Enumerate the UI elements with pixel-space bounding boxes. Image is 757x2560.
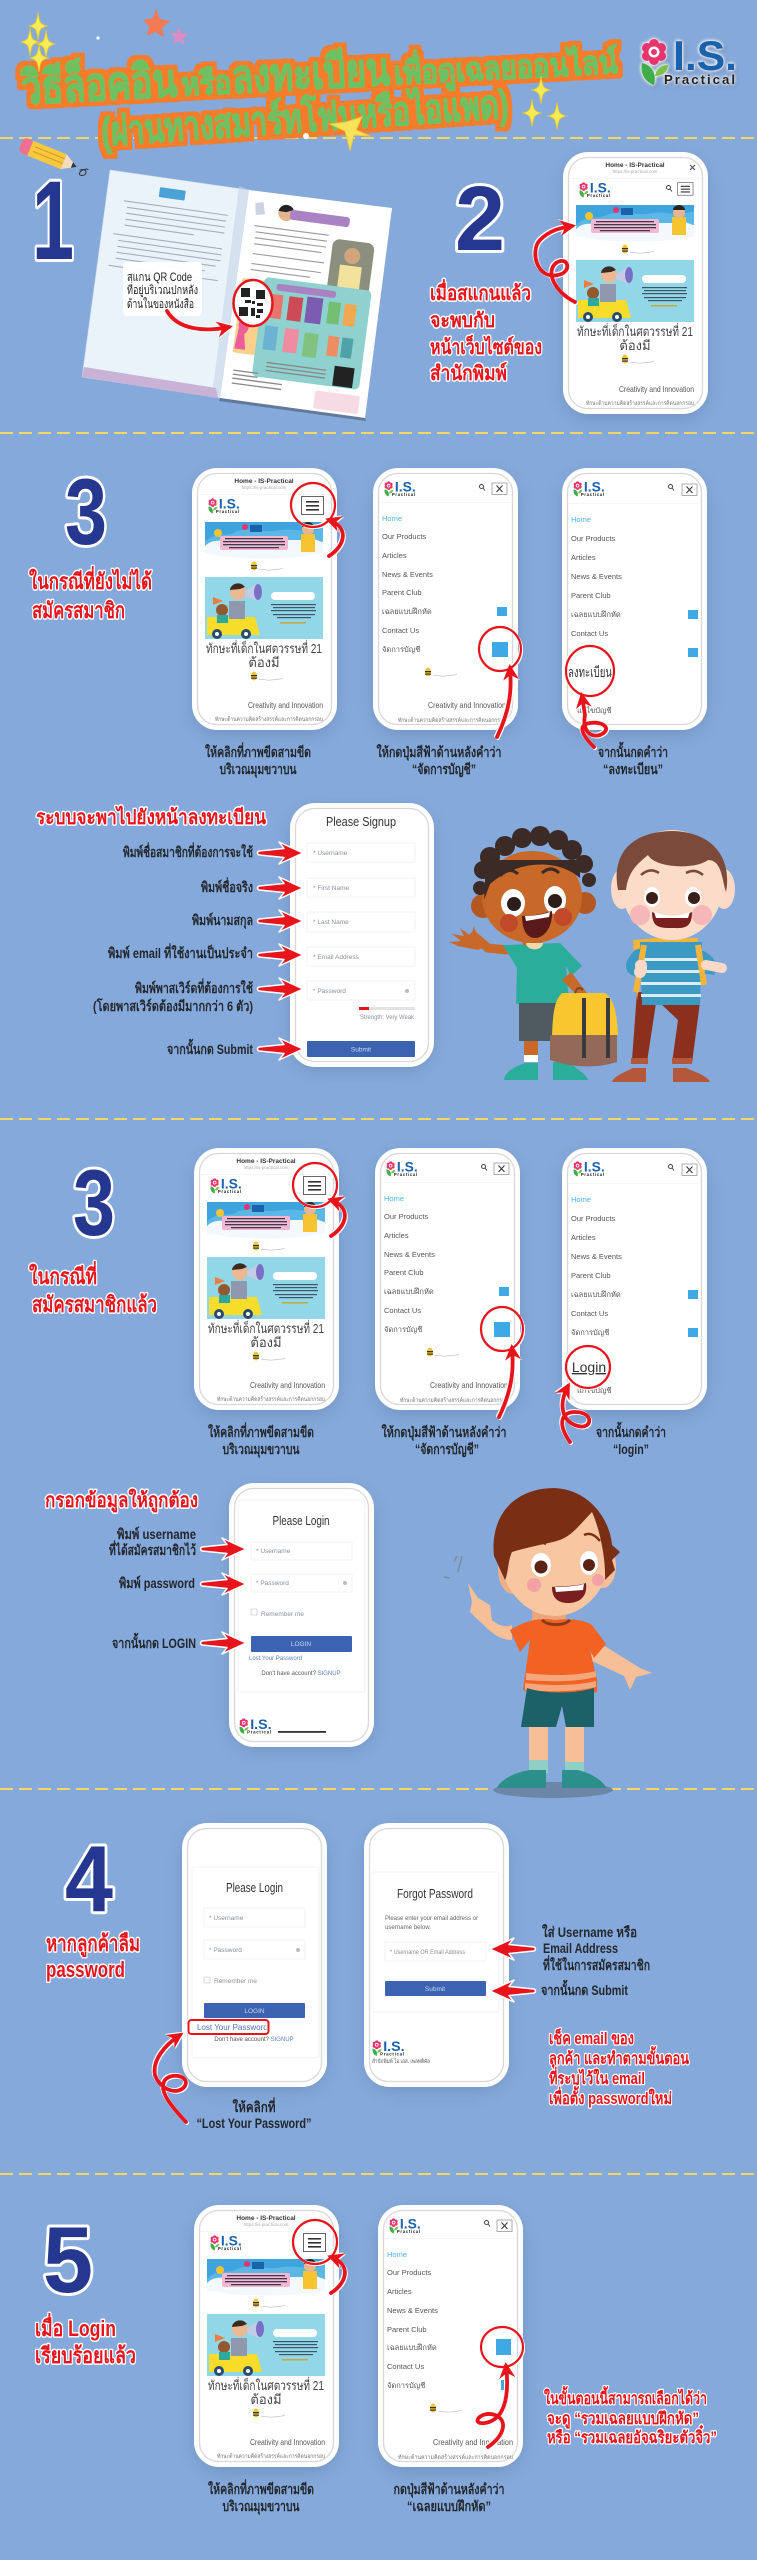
phone: signup form: Please Signup [326,814,396,829]
phone: hamburger menu step 5: https://is-practical.com [244,2222,289,2227]
phone: menu C2 login: News & Events [571,1252,622,1261]
step number 3 (already a member): 3 [73,1150,115,1255]
phone: menu C register: Our Products [571,534,615,543]
phone: login with lost password: Please Login [226,1880,283,1895]
text: choose answers: ในขั้นตอนนี้สามารถเลือกได้ว่า [544,2386,707,2408]
phone: home page (step 2): Practical [587,193,611,198]
phone: hamburger menu A2: ต้องมี [250,1335,282,1350]
phone: home page (step 2): ทักษะที่เด็กในศตวรรษที่ 21 [577,322,693,339]
phone: hamburger menu A2: ทักษะที่เด็กในศตวรรษที่ 21 [208,1319,324,1336]
phone: login with lost password: * Password [209,1947,242,1954]
phone: menu C register [562,468,707,734]
caption C2 [596,1421,666,1457]
caption B2: “จัดการบัญชี” [415,1441,479,1458]
phone: menu B2: Parent Club [384,1268,424,1277]
text: not yet a member: สมัครสมาชิก [32,598,125,623]
phone: menu C2 login: Contact Us [571,1309,608,1318]
caption B [376,743,502,778]
text: check email [549,2027,690,2108]
caption B: “จัดการบัญชี” [412,761,476,778]
illustration: boy with striped shirt [611,830,735,1082]
text: choose answers: หรือ “รวมเฉลยอัจฉริยะตัวจิ๋ว” [547,2424,717,2447]
phone: hamburger menu step 5: Practical [218,2246,242,2251]
phone: login form: Don't have account? SIGNUP [261,1671,341,1677]
phone: home page (step 2): Home - IS-Practical [605,162,665,169]
labels: login instructions [109,1526,196,1651]
phone: menu B2: Our Products [384,1212,428,1221]
caption step 5 B: กดปุ่มสีฟ้าด้านหลังคำว่า [394,2481,504,2498]
caption B2: ให้กดปุ่มสีฟ้าด้านหลังคำว่า [382,1423,506,1441]
highlight: hamburger circle and arrow step 5 [293,2220,345,2293]
phone: hamburger menu A: Creativity and Innovation [248,700,323,710]
text: not yet a member: ในกรณีที่ยังไม่ได้ [29,565,152,594]
phone: menu C register: News & Events [571,572,622,581]
labels: signup instructions: พิมพ์ชื่อสมาชิกที่ต้องการจะใช้ [123,842,253,860]
labels: signup instructions: พิมพ์พาสเวิร์ดที่ต้องการใช้ [135,978,253,996]
labels: signup instructions: พิมพ์ชื่อจริง [201,877,253,895]
phone: menu step 5: จัดการบัญชี [387,2381,425,2390]
labels: login instructions: พิมพ์ password [119,1575,195,1591]
highlight: blue button circle and arrow [479,627,521,737]
phone: forgot password form: * Username OR Email Address [390,1949,466,1956]
phone: menu step 5: Practical [397,2229,421,2234]
text: check email: เพื่อตั้ง passwordใหม่ [549,2086,672,2108]
step number 2: 2 [455,168,505,270]
phone: home page (step 2): ต้องมี [619,338,651,353]
phone: menu C2 login [562,1148,707,1414]
arrows: signup [258,842,303,1060]
labels: signup instructions: พิมพ์นามสกุล [192,912,253,929]
phone: hamburger menu A2: I.S. [221,1176,242,1192]
illustration: boy pointing up [444,1488,652,1798]
phone: menu B: Creativity and Innovation [428,700,506,710]
caption C: “ลงทะเบียน” [603,761,663,777]
phone: menu C register: เฉลยแบบฝึกหัด [571,610,621,619]
step number 5: 5 [43,2207,93,2312]
text: not yet a member [29,565,152,623]
phone: login form: I.S. [250,1717,272,1733]
phone: menu B2: เฉลยแบบฝึกหัด [384,1287,434,1296]
logo [642,32,737,87]
phone: hamburger menu A2 [194,1148,339,1414]
phone: forgot password form: I.S. [383,2039,405,2055]
phone: menu C register: Home [571,515,591,524]
phone: menu C2 login: Our Products [571,1214,615,1223]
text: forgot password: หากลูกค้าลืม [46,1931,140,1958]
phone: forgot password form: Practical [380,2052,405,2057]
phone: menu step 5: News & Events [387,2306,438,2315]
phone: menu B2: Creativity and Innovation [430,1380,508,1390]
decoration: stars and sparkles [21,9,566,150]
phone: menu C register: Articles [571,553,596,562]
illustration: open book with QR code [82,170,392,421]
caption A: บริเวณมุมขวาบน [220,761,297,778]
phone: login with lost password: Remember me [214,1978,257,1985]
phone: forgot password form [364,1823,509,2089]
phone: login with lost password: LOGIN [244,2008,265,2015]
phone: hamburger menu A2: ทักษะด้านความคิดสร้างสรรค์และการคิดนอกกรอบ [217,1395,325,1403]
phone: hamburger menu A2: Home - IS-Practical [236,1158,296,1165]
phone: login form: * Username [256,1548,291,1555]
phone: menu C register: Practical [581,492,605,497]
phone: menu C register: I.S. [584,479,605,495]
heading: system goes to signup: ระบบจะพาไปยังหน้าลงทะเบียน [36,805,266,829]
caption A2: ให้คลิกที่ภาพขีดสามขีด [208,1422,314,1440]
phone: hamburger menu A: ต้องมี [248,655,280,670]
caption: lost your password [196,2097,312,2131]
phone: hamburger menu A [192,468,337,734]
text: check email: ที่ระบุไว้ใน email [549,2066,645,2089]
phone: menu B: เฉลยแบบฝึกหัด [382,607,432,616]
caption step 5 A: ให้คลิกที่ภาพขีดสามขีด [208,2479,314,2497]
text: logged in: เมื่อ Login [35,2312,116,2341]
phone: login form: Lost Your Password [249,1656,302,1662]
icon: pencil [18,137,91,179]
phone: menu step 5: ทักษะด้านความคิดสร้างสรรค์และการคิดนอกกรอบ [398,2453,513,2461]
title: (ผ่านทางสมาร์ทโฟนหรือไอแพด) [100,80,510,155]
text: after scanning: จะพบกับ [430,310,495,332]
phone: menu step 5: Parent Club [387,2325,427,2334]
labels: signup instructions: (โดยพาสเวิร์ดต้องมีมากกว่า 6 ตัว) [93,997,253,1014]
phone: hamburger menu A: ทักษะด้านความคิดสร้างสรรค์และการคิดนอกกรอบ [215,715,323,723]
phone: menu B: Contact Us [382,626,419,635]
text: check email: เช็ค email ของ [549,2027,634,2048]
phone: menu B2: Home [384,1194,404,1203]
phone: menu B2: Practical [394,1172,418,1177]
callout: scan QR code [123,262,202,316]
phone: menu step 5: Creativity and Innovation [433,2437,513,2447]
phone: login with lost password: Lost Your Password [197,2023,268,2032]
phone: menu step 5: Articles [387,2287,412,2296]
phone: login form: Please Login [272,1513,330,1528]
phone: signup form [290,803,434,1069]
phone: menu B: I.S. [395,479,416,495]
phone: signup form: * Password [313,988,346,995]
phone: hamburger menu A2: Creativity and Innovation [250,1380,325,1390]
phone: menu B: ทักษะด้านความคิดสร้างสรรค์และการคิดนอกกรอบ [398,716,506,724]
phone: hamburger menu step 5: Home - IS-Practical [236,2215,296,2222]
phone: menu B: Practical [392,492,416,497]
title: วิธีล็อคอิน [19,52,179,114]
arrow: to QR code [167,311,229,329]
phone: menu C2 login: Practical [581,1172,605,1177]
caption C2: จากนั้นกดคำว่า [596,1421,666,1440]
phone: menu B: Home [382,514,402,523]
phone: home page (step 2): https://is-practical.com [613,169,658,174]
phone: menu B2: News & Events [384,1250,435,1259]
caption step 5 A: บริเวณมุมขวาบน [222,2498,300,2515]
text: logged in: เรียบร้อยแล้ว [35,2343,136,2368]
phone: hamburger menu A: https://is-practical.com [242,485,287,490]
highlight: hamburger circle and arrow [291,483,343,556]
phone: menu B2 [375,1148,520,1414]
text: forgot password [46,1931,140,1982]
phone: home page (step 2) [563,152,708,418]
phone: menu C2 login: เฉลยแบบฝึกหัด [571,1290,621,1299]
phone: login with lost password: Don't have account? SIGNUP [214,2037,294,2043]
phone: menu C register: ลงทะเบียน [568,664,612,680]
phone: menu step 5: Home [387,2250,407,2259]
labels: forgot password: Email Address [543,1940,618,1956]
phone: hamburger menu step 5: ทักษะที่เด็กในศตวรรษที่ 21 [208,2376,324,2393]
caption step 5 A [208,2479,314,2515]
step number 3 (not a member): 3 [65,459,107,564]
phone: signup form: * Last Name [313,919,349,926]
caption A2 [208,1422,314,1458]
phone: forgot password form: username below. [385,1924,431,1931]
phone: login with lost password: * Username [209,1915,244,1922]
phone: menu B: Parent Club [382,588,422,597]
labels: forgot password: ที่ใช้ในการสมัครสมาชิก [543,1955,650,1973]
labels: login instructions: ที่ได้สมัครสมาชิกไว้ [109,1540,196,1558]
phone: forgot password form: Forgot Password [397,1886,473,1901]
highlight: hamburger circle and arrow 2 [293,1163,345,1236]
text: choose answers: จะดู “รวมเฉลยแบบฝึกหัด” [547,2409,699,2430]
phone: menu C register: Parent Club [571,591,611,600]
logo: Practical [664,72,737,87]
phone: menu C2 login: Parent Club [571,1271,611,1280]
phone: hamburger menu step 5: Creativity and Innovation [250,2437,325,2447]
illustration: waving boy with backpack [449,826,618,1080]
callout: scan QR code: สแกน QR Code [127,270,192,284]
phone: menu B [373,468,518,734]
phone: menu B2: จัดการบัญชี [384,1325,422,1334]
callout: scan QR code: ด้านในของหนังสือ [127,297,194,311]
text: already a member [29,1260,157,1317]
phone: menu step 5: Our Products [387,2268,431,2277]
title: หรือ [180,64,232,103]
caption C [598,741,668,777]
step number 4: 4 [65,1826,113,1931]
labels: login instructions: พิมพ์ username [117,1526,196,1542]
phone: forgot password form: Please enter your email address or [385,1915,479,1922]
highlight: register circle and arrow [566,646,614,747]
arrows: login [200,1538,246,1654]
caption: lost your password: ให้คลิกที่ [232,2097,276,2115]
caption: lost your password: “Lost Your Password” [196,2115,312,2131]
heading: fill in correctly: กรอกข้อมูลให้ถูกต้อง [45,1488,198,1514]
phone: menu B2: I.S. [397,1159,418,1175]
title: เพื่อดูเฉลยออนไลน์ [393,39,619,94]
caption step 5 B: “เฉลยแบบฝึกหัด” [407,2498,491,2514]
phone: menu step 5: I.S. [400,2216,421,2232]
phone: menu B2: Articles [384,1231,409,1240]
caption step 5 B [394,2481,504,2514]
text: logged in [35,2312,136,2368]
phone: signup form: Strength: Very Weak [360,1014,415,1021]
text: check email: ลูกค้า และทำตามขั้นตอน [549,2046,690,2070]
phone: menu B: จัดการบัญชี [382,645,420,654]
caption A [205,742,311,778]
text: after scanning: หน้าเว็บไซต์ของ [430,334,542,359]
phone: home page (step 2): I.S. [590,180,611,196]
phone: menu step 5 [378,2205,523,2471]
text: already a member: สมัครสมาชิกแล้ว [32,1292,157,1317]
phone: menu C register: Contact Us [571,629,608,638]
highlight: lost password box and arrow [155,2020,268,2122]
step number 1: 1 [32,158,74,283]
caption C: จากนั้นกดคำว่า [598,741,668,760]
caption B: ให้กดปุ่มสีฟ้าด้านหลังคำว่า [376,743,502,761]
phone: menu step 5: เฉลยแบบฝึกหัด [387,2343,437,2352]
phone: login form: LOGIN [291,1641,311,1648]
phone: login form: * Password [256,1580,289,1587]
phone: hamburger menu step 5 [194,2205,339,2471]
phone: hamburger menu A2: Practical [218,1189,242,1194]
phone: menu B: Articles [382,551,407,560]
phone: login form: Remember me [261,1611,304,1618]
labels: signup instructions: พิมพ์ email ที่ใช้งานเป็นประจำ [108,943,253,961]
caption B2 [382,1423,506,1458]
callout: scan QR code: ที่อยู่บริเวณปกหลัง [127,281,198,298]
phone: menu B: Our Products [382,532,426,541]
phone: menu B2: Contact Us [384,1306,421,1315]
text: after scanning [430,278,542,385]
labels: login instructions: จากนั้นกด LOGIN [112,1632,196,1651]
phone: hamburger menu A: ทักษะที่เด็กในศตวรรษที่ 21 [206,639,322,656]
highlight: login circle and arrow [562,1346,610,1442]
labels: forgot password: ใส่ Username หรือ [542,1923,637,1940]
phone: home page (step 2): Creativity and Innovation [619,384,694,394]
phone: menu B2: ทักษะด้านความคิดสร้างสรรค์และการคิดนอกกรอบ [400,1396,508,1404]
text: forgot password: password [46,1957,125,1982]
logo: I.S. [673,32,737,79]
phone: hamburger menu step 5: ทักษะด้านความคิดสร้างสรรค์และการคิดนอกกรอบ [217,2452,325,2460]
phone: menu C2 login: Login [572,1359,606,1375]
title: ลงทะเบียน [231,43,391,103]
phone: login form [229,1483,374,1749]
labels: forgot password: จากนั้นกด Submit [541,1979,628,1998]
text: after scanning: สำนักพิมพ์ [430,362,507,385]
phone: signup form: * Email Address [313,954,360,961]
phone: hamburger menu A2: https://is-practical.com [244,1165,289,1170]
phone: hamburger menu A: I.S. [219,496,240,512]
arrows: forgot password [490,1938,536,2002]
phone: signup form: * Username [313,850,348,857]
phone: menu C2 login: จัดการบัญชี [571,1328,609,1337]
phone: hamburger menu A: Practical [216,509,240,514]
highlight: blue button circle and arrow step 5 [478,2327,523,2447]
phone: signup form: Submit [351,1046,371,1054]
text: after scanning: เมื่อสแกนแล้ว [430,278,531,305]
phone: menu B: News & Events [382,570,433,579]
title [19,29,621,159]
text: already a member: ในกรณีที่ [29,1260,97,1289]
phone: hamburger menu A: Home - IS-Practical [234,478,294,485]
phone: home page (step 2): ทักษะด้านความคิดสร้างสรรค์และการคิดนอกกรอบ [586,399,694,407]
labels: forgot password [541,1923,650,1998]
labels: signup instructions: จากนั้นกด Submit [167,1038,253,1057]
phone: signup form: * First Name [313,885,350,892]
phone: forgot password form: สำนักพิมพ์ ไอ.เอส. เพลทติคัล [372,2058,430,2065]
phone: menu C2 login: I.S. [584,1159,605,1175]
caption A: ให้คลิกที่ภาพขีดสามขีด [205,742,311,760]
arrow: step 2 curl [535,226,575,302]
phone: menu C register: แก้ไขบัญชี [577,706,612,715]
phone: login with lost password [182,1823,327,2089]
phone: forgot password form: Submit [425,1986,445,1993]
caption A2: บริเวณมุมขวาบน [222,1441,300,1458]
phone: menu C2 login: Articles [571,1233,596,1242]
phone: menu step 5: Contact Us [387,2362,424,2371]
highlight: blue button circle and arrow 2 [481,1307,523,1417]
phone: login form: Practical [247,1730,272,1735]
phone: hamburger menu step 5: ต้องมี [250,2392,282,2407]
phone: menu C2 login: แก้ไขบัญชี [577,1386,612,1395]
labels: signup instructions [93,842,253,1057]
text: choose answers [544,2386,717,2447]
phone: menu C2 login: Home [571,1195,591,1204]
caption C2: “login” [613,1441,649,1457]
phone: hamburger menu step 5: I.S. [221,2233,242,2249]
